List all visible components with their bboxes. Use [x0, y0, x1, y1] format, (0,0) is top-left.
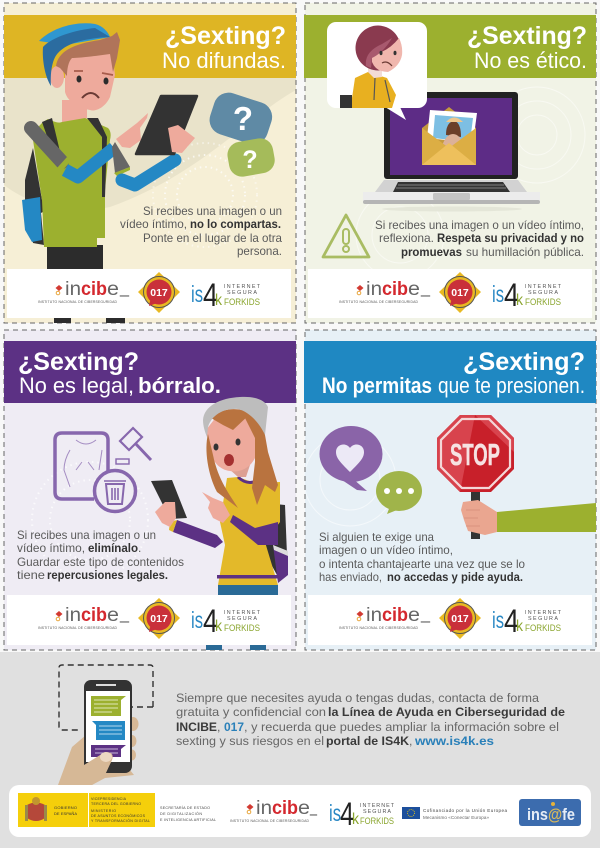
- text block: sexting y sus riesgos en el: [176, 734, 324, 748]
- logo: incibe: cib: [81, 605, 107, 626]
- icon: green question bubble: ?: [242, 146, 258, 174]
- icon: photo, gavel and bin: [55, 428, 151, 512]
- text block: Guardar este tipo de contenidos: [17, 555, 184, 569]
- text block: Siempre que necesites ayuda o tengas dudas, contacta de forma: [176, 691, 539, 705]
- header band: [4, 341, 296, 403]
- text block: 017: [224, 720, 244, 734]
- text block: [319, 530, 525, 584]
- logo: 017 badge: [439, 598, 481, 639]
- logo: is4k: FORKIDS: [224, 623, 260, 633]
- logo: 017 badge: [439, 272, 481, 313]
- logo: is4k: 4: [504, 603, 519, 639]
- illustration: stop sign held by hand: [437, 415, 596, 539]
- logo: incibe: [38, 604, 130, 630]
- logo: incibe: INSTITUTO NACIONAL DE CIBERSEGURIDAD: [339, 626, 419, 630]
- panel: no es legal: [4, 330, 296, 650]
- logo: is4k: k: [516, 618, 524, 635]
- header band: [304, 341, 596, 403]
- text block: Respeta su privacidad y no: [437, 231, 584, 245]
- logo: incibe: _: [309, 797, 317, 816]
- text block: su humillación pública.: [466, 245, 584, 259]
- logo: is4k: FORKIDS: [360, 816, 394, 826]
- text block: gratuita y confidencial con: [176, 705, 326, 719]
- text block: Si recibes una imagen o un vídeo íntimo,: [375, 218, 584, 232]
- logo: incibe: cib: [272, 798, 298, 819]
- logo: incibe: INSTITUTO NACIONAL DE CIBERSEGURIDAD: [38, 300, 118, 304]
- logo: european union: Cofinanciado por la Unión Europea: [423, 808, 507, 813]
- text: secretaría de estado: E INTELIGENCIA ARTIFICIAL: [160, 818, 216, 822]
- logo: incibe: [38, 278, 130, 304]
- text block: www.is4k.es: [414, 734, 494, 748]
- text block: no accedas y pide ayuda.: [387, 570, 523, 584]
- logo: incibe: e: [107, 605, 119, 626]
- heading: ¿Sexting?: [467, 22, 587, 50]
- logo: is4k: SEGURA: [227, 290, 257, 296]
- logo: incibe: INSTITUTO NACIONAL DE CIBERSEGURIDAD: [38, 626, 118, 630]
- footer logo bar: [9, 785, 591, 837]
- logo: is4k: INTERNET: [224, 284, 261, 290]
- panel: no difundas: [4, 3, 296, 323]
- logo: is4k: 4: [203, 603, 218, 639]
- logo: is4k: 4: [504, 277, 519, 313]
- text block: imagen o un vídeo íntimo,: [319, 543, 453, 557]
- logo strip: [308, 595, 592, 645]
- logo: 017 badge: 017: [451, 287, 469, 299]
- icon: blue question bubble: ?: [233, 100, 253, 137]
- logo: is4k: SEGURA: [528, 616, 558, 622]
- logo: incibe: cib: [382, 605, 408, 626]
- text block: reflexiona.: [379, 231, 434, 245]
- text block: repercusiones legales.: [47, 568, 168, 582]
- logo: is4k: 4: [340, 796, 354, 832]
- logo: incibe: _: [420, 604, 431, 623]
- logo: incibe: in: [65, 605, 81, 626]
- logo: is4k: k: [215, 618, 223, 635]
- icon: phone in hand: [58, 665, 153, 785]
- panel: no es ético: [304, 3, 596, 323]
- logo: is4k: [191, 603, 261, 639]
- logo: insafe: ins@fe: [527, 805, 575, 824]
- logo: incibe: cib: [81, 279, 107, 300]
- text: secretaría de estado: SECRETARÍA DE ESTADO: [160, 806, 210, 810]
- logo: incibe: _: [420, 278, 431, 297]
- logo: gobierno de españa: TERCERA DEL GOBIERNO: [91, 802, 141, 806]
- text block: has enviado,: [319, 570, 382, 584]
- logo: european union: [402, 807, 507, 820]
- logo: 017 badge: 017: [150, 613, 168, 625]
- logo: is4k: SEGURA: [363, 809, 391, 815]
- text block: vídeo íntimo,: [17, 541, 85, 555]
- text block: [120, 204, 282, 258]
- text block: elimínalo: [88, 541, 138, 555]
- panel: footer: [0, 652, 600, 848]
- text block: ,: [217, 720, 220, 734]
- header band: [4, 15, 296, 78]
- logo: is4k: [492, 277, 562, 313]
- logo: incibe: INSTITUTO NACIONAL DE CIBERSEGURIDAD: [339, 300, 419, 304]
- logo: incibe: e: [298, 798, 310, 819]
- logo: incibe: in: [65, 279, 81, 300]
- heading: [322, 348, 585, 398]
- heading: ¿Sexting?: [165, 22, 286, 50]
- logo: is4k: [191, 277, 261, 313]
- heading: No es legal,: [19, 373, 134, 398]
- text: secretaría de estado: [160, 806, 216, 822]
- text block: [375, 218, 584, 259]
- illustration: laptop with envelope: [363, 92, 540, 212]
- illustration: stop sign held by hand: STOP: [450, 437, 500, 472]
- logo: incibe: e: [408, 605, 420, 626]
- logo: 017 badge: [138, 598, 180, 639]
- logo: european union: Mecanismo «Conectar Europa»: [423, 815, 489, 820]
- logo: is4k: is: [191, 281, 203, 307]
- icon: blue question bubble: [206, 89, 276, 148]
- logo: is4k: [329, 796, 395, 832]
- heading: ¿Sexting?: [18, 348, 139, 376]
- logo strip: [7, 269, 291, 318]
- logo: incibe: e: [408, 279, 420, 300]
- logo: is4k: k: [516, 292, 524, 309]
- logo: is4k: SEGURA: [227, 616, 257, 622]
- logo: is4k: 4: [203, 277, 218, 313]
- logo: gobierno de españa: DE ESPAÑA: [54, 811, 77, 816]
- text block: la Línea de Ayuda en Ciberseguridad de: [328, 705, 565, 719]
- heading: [18, 348, 221, 398]
- logo strip: [308, 269, 592, 318]
- logo: is4k: is: [492, 281, 504, 307]
- logo: incibe: _: [119, 604, 130, 623]
- icon: envelope with photo: [422, 107, 477, 165]
- logo: incibe: [339, 278, 431, 304]
- logo: is4k: [492, 603, 562, 639]
- text block: [176, 691, 565, 748]
- icon: warning triangle: [323, 215, 369, 257]
- icon: green dots bubble: [376, 471, 422, 514]
- logo: gobierno de españa: Y TRANSFORMACIÓN DIGITAL: [91, 818, 150, 823]
- illustration: girl with phone: [151, 397, 288, 650]
- logo: 017 badge: [138, 272, 180, 313]
- text block: Ponte en el lugar de la otra: [143, 231, 282, 245]
- logo: is4k: is: [329, 800, 341, 826]
- text block: Si alguien te exige una: [319, 530, 434, 544]
- text block: Si recibes una imagen o un: [143, 204, 282, 218]
- text block: Si recibes una imagen o un: [17, 528, 156, 542]
- text block: ,: [409, 734, 412, 748]
- text block: INCIBE: [176, 720, 217, 734]
- text block: no lo compartas.: [190, 217, 281, 231]
- heading: No es ético.: [474, 48, 587, 73]
- panel: no permitas: [304, 330, 596, 650]
- text block: vídeo íntimo,: [120, 217, 187, 231]
- logo: is4k: INTERNET: [525, 610, 562, 616]
- logo: gobierno de españa: VICEPRESIDENCIA: [91, 797, 127, 801]
- heading: No difundas.: [162, 48, 286, 73]
- logo: gobierno de españa: MINISTERIO: [91, 809, 116, 813]
- text block: , y recuerda que puedes ampliar la información sobre el: [244, 720, 559, 734]
- heading: [467, 22, 587, 73]
- logo: is4k: INTERNET: [525, 284, 562, 290]
- logo: incibe: in: [366, 279, 382, 300]
- logo: incibe: in: [256, 798, 272, 819]
- heading: No permitas: [322, 373, 432, 398]
- logo: is4k: is: [191, 607, 203, 633]
- logo: gobierno de españa: DE ASUNTOS ECONÓMICOS: [91, 813, 146, 818]
- text block: persona.: [237, 244, 282, 258]
- logo: 017 badge: 017: [451, 613, 469, 625]
- heading: bórralo.: [138, 373, 221, 398]
- text block: portal de IS4K: [326, 734, 409, 748]
- logo: incibe: [339, 604, 431, 630]
- logo: gobierno de españa: [18, 793, 155, 827]
- logo: incibe: INSTITUTO NACIONAL DE CIBERSEGURIDAD: [230, 819, 310, 823]
- text block: .: [138, 541, 141, 555]
- logo: is4k: INTERNET: [224, 610, 261, 616]
- header band: [304, 15, 596, 78]
- logo: is4k: FORKIDS: [525, 297, 561, 307]
- logo: incibe: e: [107, 279, 119, 300]
- logo: is4k: k: [352, 811, 360, 828]
- logo strip: [7, 595, 291, 645]
- logo: is4k: FORKIDS: [525, 623, 561, 633]
- text block: tiene: [17, 568, 45, 582]
- logo: is4k: FORKIDS: [224, 297, 260, 307]
- text block: o intenta chantajearte una vez que se lo: [319, 557, 525, 571]
- text: secretaría de estado: DE DIGITALIZACIÓN: [160, 811, 202, 816]
- logo: incibe: in: [366, 605, 382, 626]
- logo: incibe: cib: [382, 279, 408, 300]
- heading: [162, 22, 286, 73]
- logo: insafe: [519, 799, 581, 826]
- text block: promuevas: [401, 245, 462, 259]
- icon: purple heart bubble: [320, 426, 382, 491]
- logo: incibe: [230, 797, 317, 823]
- illustration: speech card with girl: [327, 22, 427, 120]
- icon: green question bubble: [225, 136, 277, 179]
- logo: incibe: _: [119, 278, 130, 297]
- logo: is4k: INTERNET: [360, 803, 395, 809]
- logo: gobierno de españa: GOBIERNO: [54, 805, 77, 810]
- illustration: boy with tablet: [22, 23, 197, 323]
- logo: is4k: k: [215, 292, 223, 309]
- logo: is4k: is: [492, 607, 504, 633]
- text block: [17, 528, 184, 582]
- heading: ¿Sexting?: [463, 348, 585, 376]
- logo: 017 badge: 017: [150, 287, 168, 299]
- logo: is4k: SEGURA: [528, 290, 558, 296]
